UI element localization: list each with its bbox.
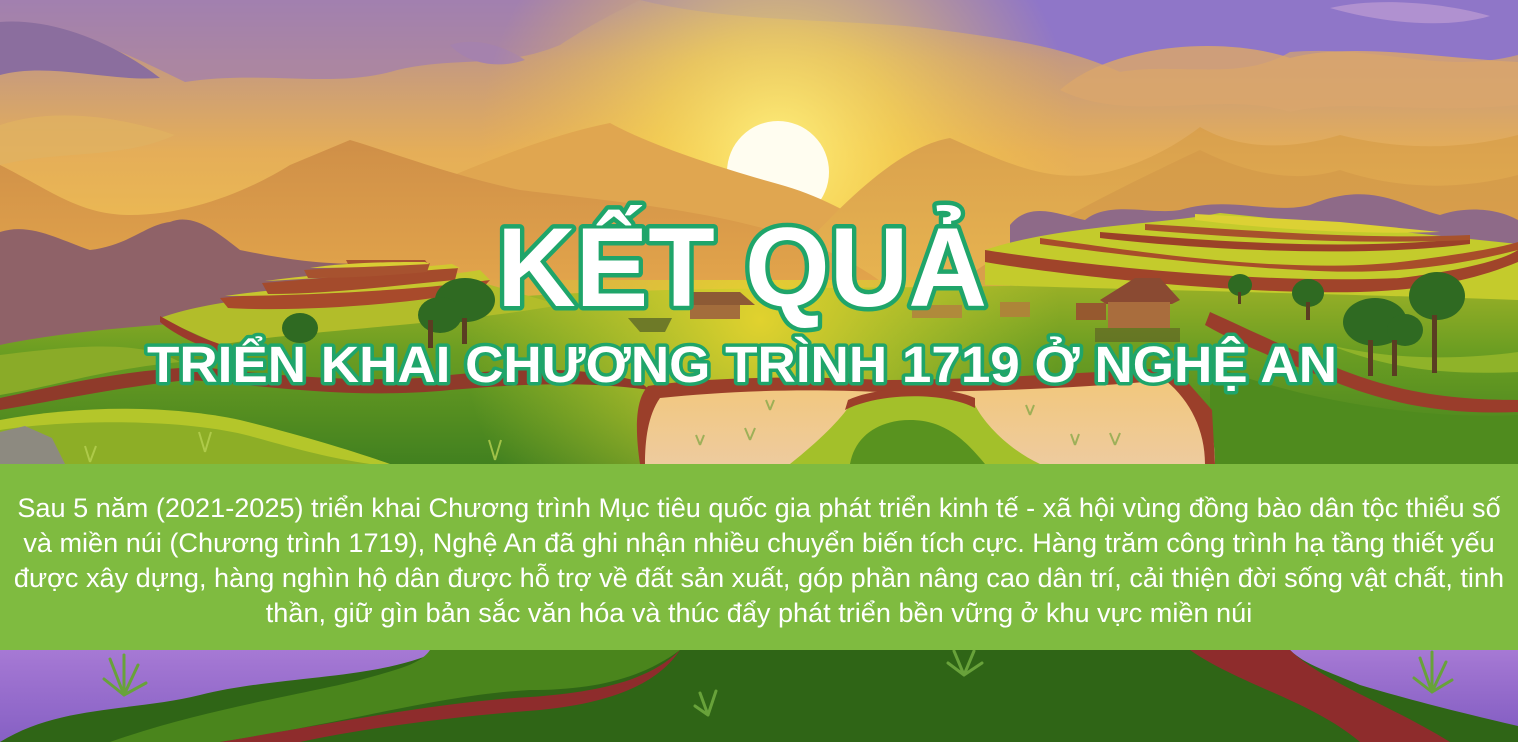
trees — [282, 272, 1465, 376]
clouds — [0, 0, 1518, 165]
sun glow — [0, 0, 1518, 340]
bottom light band left — [110, 650, 680, 742]
panel: intro band — [0, 464, 1518, 650]
far mountains — [0, 123, 1518, 330]
sky — [0, 0, 1518, 340]
main field — [0, 270, 1518, 470]
text block: intro paragraph: và miền núi (Chương trình 1719), Nghệ An đã ghi nhận nhiều chuyển biến tích cực. Hàng trăm công trình hạ tầng thiết yếu — [23, 527, 1495, 558]
bottom water right — [1290, 650, 1518, 726]
flooded rice pond — [637, 368, 1215, 464]
right terraces — [985, 213, 1518, 300]
text block: intro paragraph: thần, giữ gìn bản sắc văn hóa và thúc đẩy phát triển bền vững ở khu vực miền núi — [266, 597, 1252, 628]
text block: intro paragraph — [14, 492, 1504, 628]
bottom strip ground — [0, 650, 1518, 742]
text block: intro paragraph: được xây dựng, hàng nghìn hộ dân được hỗ trợ về đất sản xuất, góp phần nâng cao dân trí, cải thiện đời sống vật chất, tinh — [14, 562, 1504, 593]
subtitle: TRIỂN KHAI CHƯƠNG TRÌNH 1719 Ở NGHỆ AN — [147, 335, 1337, 393]
lower field contours — [0, 312, 1518, 464]
huts — [628, 278, 1180, 342]
rock — [0, 426, 65, 464]
sun — [727, 121, 829, 223]
tree line — [0, 194, 1518, 345]
bottom red bank left — [220, 650, 680, 742]
bottom tufts — [104, 651, 1452, 715]
left terraces — [160, 260, 560, 358]
bottom water left — [0, 650, 440, 742]
rice seedlings — [85, 400, 1120, 462]
bottom red bank right — [1190, 650, 1450, 742]
title: KẾT QUẢ: KẾT QUẢ — [497, 205, 987, 330]
text block: intro paragraph: Sau 5 năm (2021-2025) triển khai Chương trình Mục tiêu quốc gia phát triển kinh tế - xã hội vùng đồng bào dân tộc thiểu số — [17, 492, 1501, 523]
